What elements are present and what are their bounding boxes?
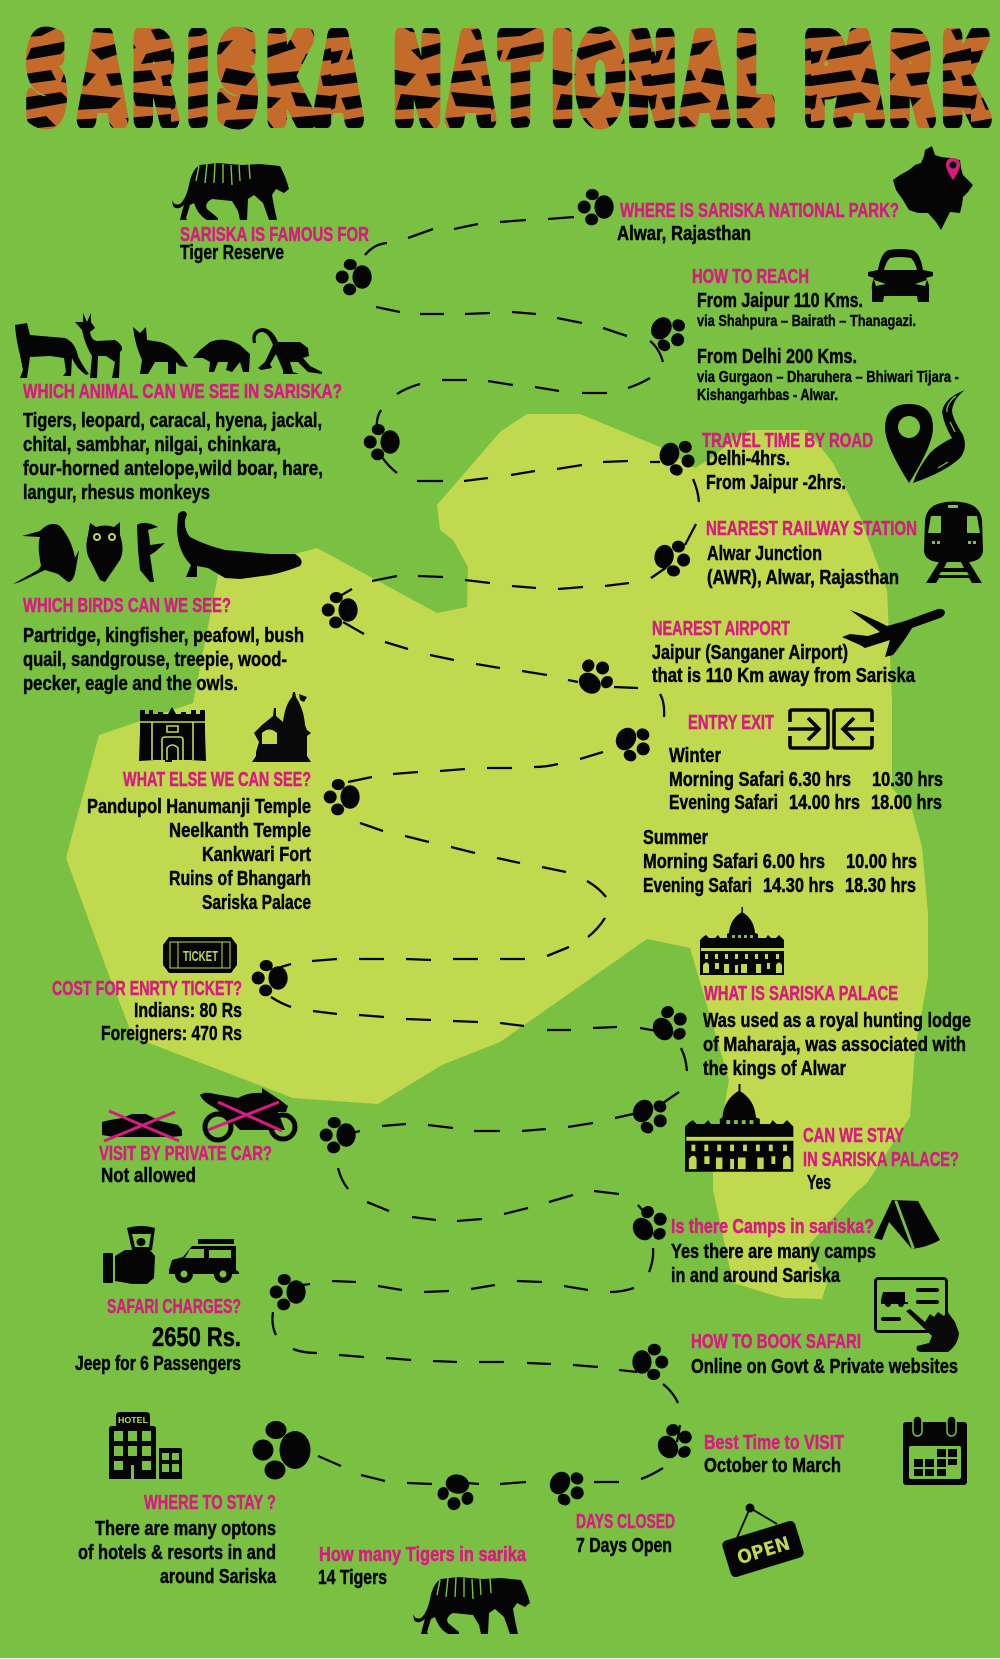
answer: 7 Days Open [576,1534,672,1557]
heading: HOW TO BOOK SAFARI [691,1330,861,1353]
icon: fort [139,707,206,762]
paw 8 [570,651,621,702]
icon: boar [193,340,250,372]
dashed trail [271,217,699,1484]
panel: what else [87,692,311,914]
panel: birds [13,511,304,695]
panel: sariska palace [700,907,971,1080]
paw prints [252,189,700,1513]
panel: private vehicles [99,1088,295,1187]
animal list: chital, sambhar, nilgai, chinkara, [23,433,281,456]
icon: booking card and hand [876,1278,959,1352]
panel: airport [652,609,945,687]
panel: stay in palace [685,1084,959,1194]
heading: WHERE TO STAY ? [144,1491,276,1514]
paw 9 [609,718,658,768]
panel: where is sariska [617,146,973,245]
panel: how many tigers [318,1543,530,1634]
airport name: Jaipur (Sanganer Airport) [652,641,848,664]
description: around Sariska [160,1565,276,1588]
description: of hotels & resorts in and [78,1541,276,1564]
description [703,1009,971,1080]
heading: CAN WE STAY [803,1124,904,1147]
sights list: Kankwari Fort [202,843,311,866]
icon: tent [874,1200,940,1249]
icon: kingfisher [13,524,79,584]
panel: travel time [702,390,965,494]
heading: VISIT BY PRIVATE CAR? [99,1142,272,1165]
answer: October to March [704,1454,841,1477]
panel: railway station [706,502,983,589]
station name: Alwar Junction [707,542,822,565]
Indians price: Indians: 80 Rs [134,999,242,1022]
icon: large palace [685,1084,793,1172]
answer: Tiger Reserve [180,241,284,264]
paw 20 [435,1471,477,1513]
answer: Alwar, Rajasthan [617,222,751,245]
icon: hotel [109,1412,182,1479]
heading: ENTRY EXIT [688,711,774,734]
paw 18 [651,1418,700,1467]
icon: calendar [903,1416,967,1485]
icon: deer [75,313,122,378]
heading: NEAREST AIRPORT [652,617,790,640]
heading: WHICH BIRDS CAN WE SEE? [23,594,231,617]
panel: animals [15,313,342,504]
paw 4 [364,424,400,460]
paw 21 [252,1421,310,1480]
price: 2650 Rs. [152,1322,241,1352]
light green park area [66,414,928,1299]
heading: WHERE IS SARISKA NATIONAL PARK? [620,199,899,222]
sights list: Pandupol Hanumanji Temple [87,795,311,818]
answer: Yes there are many camps [671,1240,876,1263]
winter timings: 10.30 hrs [872,768,943,791]
summer timings: 18.30 hrs [845,874,916,897]
station location: (AWR), Alwar, Rajasthan [707,566,899,589]
icon: peacock [177,511,302,579]
icon: crossed car [102,1111,182,1141]
sights list: Ruins of Bhangarh [169,867,311,890]
bird list: quail, sandgrouse, treepie, wood- [23,648,287,671]
icon: hand holding money [103,1226,155,1284]
heading: How many Tigers in sarika [319,1543,526,1566]
summer timings: Evening Safari [643,874,752,897]
icon: crossed motorbike [200,1088,295,1140]
icon: jackal [133,327,188,374]
panel: booking [691,1278,959,1378]
Delhi time: Delhi-4hrs. [706,447,790,470]
paw 10 [324,779,360,815]
paw 3 [643,308,693,358]
icon: map pin and road [885,390,965,483]
sights list: Sariska Palace [202,891,311,914]
heading: HOW TO REACH [692,265,809,288]
icon: tiger [172,163,289,220]
icon: monkey [252,328,322,374]
sights list [87,795,311,914]
heading: WHAT ELSE WE CAN SEE? [123,768,311,791]
animal list [23,409,323,504]
winter timings: Winter [669,744,721,767]
summer timings: Summer [643,826,708,849]
icon: ticket: TICKET [183,948,218,965]
icon: owl [86,522,122,582]
heading: Best Time to VISIT [704,1431,844,1454]
description: the kings of Alwar [703,1057,846,1080]
paw 5 [654,434,700,480]
paw 7 [322,592,358,628]
route detail: via Shahpura – Bairath – Thanagazi. [697,313,916,330]
panel: best time [704,1416,967,1485]
sights list: Neelkanth Temple [169,819,311,842]
paw 17 [632,1344,668,1380]
summer timings: Morning Safari 6.00 hrs [643,850,825,873]
panel: ticket cost [52,937,242,1045]
panel: famous for [172,163,369,264]
paw 15 [626,1200,675,1249]
panel: how to reach [692,249,959,404]
bird list: pecker, eagle and the owls. [23,672,238,695]
icon: Rajasthan map with pin [893,146,973,230]
paw 13 [626,1090,675,1140]
Foreigners price: Foreigners: 470 Rs [101,1022,242,1045]
panel: camps [671,1200,940,1287]
panel: days closed [576,1504,805,1578]
Jaipur time: From Jaipur -2hrs. [706,471,846,494]
heading: SAFARI CHARGES? [107,1295,241,1318]
airport distance: that is 110 Km away from Sariska [652,664,915,687]
summer timings: 10.00 hrs [846,850,917,873]
icon: open sign [721,1504,805,1578]
icon: jeep [169,1239,239,1283]
icon: tiger [413,1577,530,1634]
winter timings: Morning Safari 6.30 hrs [669,768,851,791]
route detail: Kishangarhbas - Alwar. [697,387,838,404]
route from Jaipur: From Jaipur 110 Kms. [697,289,863,312]
paw 16 [270,1274,306,1310]
winter timings: 18.00 hrs [871,791,942,814]
icon: temple [252,692,311,762]
animal list: Tigers, leopard, caracal, hyena, jackal, [23,409,322,432]
icon: woodpecker [137,523,165,582]
icon: leopard [15,323,89,378]
animal list: four-horned antelope,wild boar, hare, [23,457,323,480]
heading: TRAVEL TIME BY ROAD [702,429,873,452]
paw 19 [543,1462,592,1512]
bird list: Partridge, kingfisher, peafowl, bush [23,624,304,647]
answer second line: in and around Sariska [671,1264,840,1287]
icon: train [924,502,983,583]
panel: safari charges [75,1226,241,1375]
paw 6 [651,537,693,579]
paw 14 [320,1117,356,1153]
answer: 14 Tigers [318,1566,387,1589]
winter timings [669,744,943,814]
panel: where to stay [78,1412,276,1588]
animal list: langur, rhesus monkeys [23,481,210,504]
paw 1 [578,189,614,225]
heading: WHAT IS SARISKA PALACE [704,982,898,1005]
winter timings: Evening Safari [669,791,778,814]
paw 11 [252,960,288,996]
description: There are many optons [95,1517,276,1540]
winter timings: 14.00 hrs [789,791,860,814]
icon: car [868,249,933,302]
answer: Yes [807,1171,831,1194]
description [78,1517,276,1588]
icon: palace [700,907,784,975]
icon: entry exit arrows [788,710,874,748]
route from Delhi: From Delhi 200 Kms. [697,345,857,368]
bird list [23,624,304,695]
summer timings [643,826,917,897]
summer timings: 14.30 hrs [763,874,834,897]
icon: ticket [163,937,237,973]
price detail: Jeep for 6 Passengers [75,1352,241,1375]
paw 12 [646,1000,695,1049]
heading: NEAREST RAILWAY STATION [706,517,917,540]
icon: open sign: OPEN [735,1532,793,1569]
answer: Not allowed [101,1164,196,1187]
paw 2 [336,259,372,295]
heading: WHICH ANIMAL CAN WE SEE IN SARISKA? [23,380,342,403]
heading: SARISKA IS FAMOUS FOR [180,223,369,246]
heading: DAYS CLOSED [576,1510,675,1533]
title: SARISKA NATIONAL PARK [26,15,988,146]
heading: COST FOR ENRTY TICKET? [52,977,242,1000]
heading: Is there Camps in sariska? [671,1215,874,1238]
icon: hotel: HOTEL [118,1416,148,1425]
panel: entry exit timings [643,710,943,897]
icon: plane [842,609,945,657]
